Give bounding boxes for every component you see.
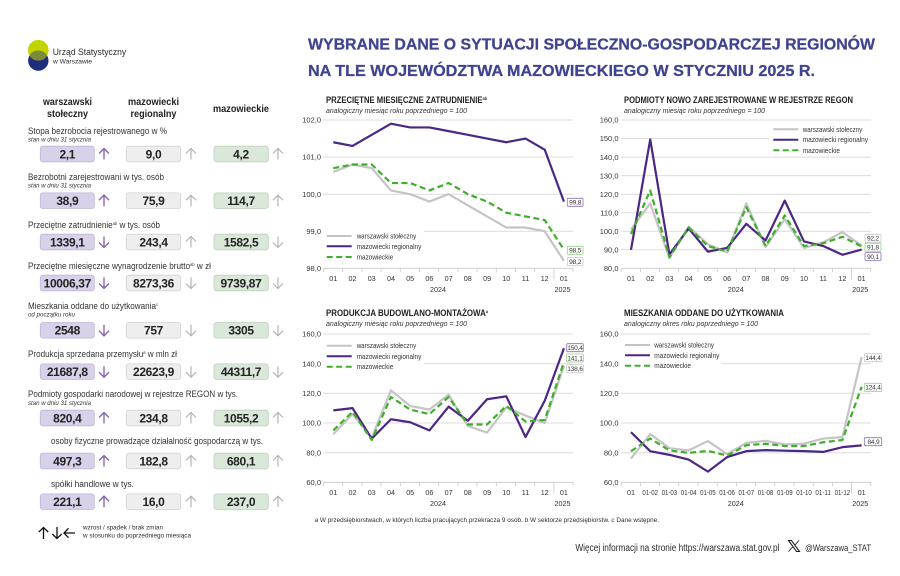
x axis: 01-12 xyxy=(835,488,850,497)
arrow legend: wzrost / spadek / brak zmian xyxy=(82,525,163,532)
y axis labels: 120,0 xyxy=(600,190,618,199)
indicator: produkcja sprzedana przemysłu: w mln zł xyxy=(145,349,177,359)
y axis labels: 100,0 xyxy=(302,419,321,428)
indicator: przeciętne wynagrodzenie: 10006,37 xyxy=(44,276,92,290)
indicator: stopa bezrobocia: Stopa bezrobocia rejestrowanego w % xyxy=(28,126,167,136)
indicator: stopa bezrobocia: 2,1 xyxy=(59,147,76,161)
indicator: przeciętne wynagrodzenie: w zł xyxy=(195,261,211,271)
indicator: osoby fizyczne: 182,8 xyxy=(139,454,168,468)
x axis: 02 xyxy=(348,488,356,497)
y axis labels: 140,0 xyxy=(600,153,618,162)
x axis xyxy=(621,268,871,294)
indicator: osoby fizyczne: 680,1 xyxy=(227,454,256,468)
indicator: przeciętne zatrudnienie: 1339,1 xyxy=(50,235,85,249)
x axis: 01-06 xyxy=(719,488,735,497)
x axis: 06 xyxy=(723,274,731,283)
y axis labels: 99,0 xyxy=(306,227,321,236)
chart subtitle: analogiczny miesiąc roku poprzedniego = 100 xyxy=(624,106,766,115)
end value labels xyxy=(864,354,882,446)
chart title: PRZECIĘTNE MIESIĘCZNE ZATRUDNIENIE xyxy=(326,95,509,105)
x axis: 2024 xyxy=(430,499,446,508)
chart: produkcja budowlano-montażowa xyxy=(302,308,583,508)
chart title: a xyxy=(486,309,488,314)
x axis: 02 xyxy=(348,274,356,283)
x axis: 05 xyxy=(406,274,414,283)
x axis: 01-05 xyxy=(700,488,716,497)
indicator: mieszkania oddane: 2548 xyxy=(55,324,81,338)
indicator: bezrobotni zarejestrowani: Bezrobotni zarejestrowani w tys. osób xyxy=(28,172,164,182)
end value labels xyxy=(567,198,583,266)
x axis: 01-08 xyxy=(758,488,773,497)
y axis labels: 130,0 xyxy=(600,171,618,180)
end value labels: 98,5 xyxy=(569,248,582,255)
x axis: 04 xyxy=(685,274,693,283)
x axis: 2024 xyxy=(728,499,744,508)
y axis labels: 90,0 xyxy=(604,246,618,254)
indicator: podmioty w rejestrze REGON: 1055,2 xyxy=(224,411,259,425)
column headers: warszawski xyxy=(42,97,92,108)
chart: podmioty nowo zarejestrowane xyxy=(600,95,881,294)
indicator: przeciętne zatrudnienie: 1582,5 xyxy=(224,235,259,249)
x axis: 2025 xyxy=(852,499,868,508)
y axis labels: 100,0 xyxy=(302,190,321,199)
chart title: PODMIOTY NOWO ZAREJESTROWANE W REJESTRZE REGON xyxy=(624,95,853,105)
column headers: stołeczny xyxy=(47,109,88,120)
x axis: 04 xyxy=(387,274,395,283)
y axis labels xyxy=(600,330,618,487)
x axis: 01-04 xyxy=(681,488,697,497)
y axis labels: 80,0 xyxy=(604,448,618,457)
y axis labels: 160,0 xyxy=(600,330,618,339)
end value labels: 124,4 xyxy=(865,385,881,392)
indicator: podmioty w rejestrze REGON: stan w dniu 31 stycznia xyxy=(28,401,92,407)
indicator: przeciętne zatrudnienie: 243,4 xyxy=(139,235,168,249)
indicator: produkcja sprzedana przemysłu: 44311,7 xyxy=(221,365,262,379)
y axis labels: 98,0 xyxy=(306,264,321,273)
x axis: 07 xyxy=(742,274,750,283)
y axis labels: 102,0 xyxy=(302,116,321,125)
x axis: 10 xyxy=(502,274,510,283)
legend: mazowieckie xyxy=(654,361,691,370)
end value labels xyxy=(567,344,583,373)
indicator: mieszkania oddane: Mieszkania oddane do użytkowania xyxy=(28,301,170,311)
x axis: 01-02 xyxy=(642,488,658,497)
x axis: 03 xyxy=(368,274,376,283)
indicator: przeciętne wynagrodzenie: 9739,87 xyxy=(221,276,262,290)
x axis: 08 xyxy=(464,488,472,497)
x axis: 07 xyxy=(445,274,453,283)
y axis labels xyxy=(600,116,618,273)
indicator: przeciętne zatrudnienie xyxy=(28,220,283,250)
x axis: 09 xyxy=(781,274,789,283)
y axis labels: 100,0 xyxy=(600,227,618,236)
chart title: ab xyxy=(483,96,487,101)
legend xyxy=(773,125,868,155)
x axis: 06 xyxy=(425,488,433,497)
chart title: PRODUKCJA BUDOWLANO-MONTAŻOWA xyxy=(326,308,508,318)
indicator: stopa bezrobocia: 9,0 xyxy=(146,147,162,161)
indicator: osoby fizyczne: 497,3 xyxy=(53,454,82,468)
indicator: podmioty w rejestrze REGON: 820,4 xyxy=(53,411,82,425)
legend: warszawski stołeczny xyxy=(356,341,416,350)
end value labels xyxy=(865,234,881,261)
arrow legend: w stosunku do poprzedniego miesiąca xyxy=(82,532,191,539)
x axis: 01-07 xyxy=(739,488,754,497)
x axis: 2025 xyxy=(852,285,868,294)
x axis: 01-10 xyxy=(796,488,812,497)
column headers: mazowiecki xyxy=(128,97,179,108)
end value labels: 91,8 xyxy=(867,245,880,252)
x axis: 09 xyxy=(483,274,491,283)
legend: mazowieckie xyxy=(803,146,840,155)
arrow legend xyxy=(39,525,191,539)
x axis: 12 xyxy=(541,274,549,283)
y axis labels: 60,0 xyxy=(306,478,321,487)
indicator: mieszkania oddane: c xyxy=(156,302,159,307)
indicator: produkcja sprzedana przemysłu xyxy=(28,349,283,380)
x axis: 06 xyxy=(425,274,433,283)
data lines xyxy=(631,139,862,258)
y axis labels: 140,0 xyxy=(600,359,618,368)
footer: more information link: Więcej informacji na stronie https://warszawa.stat.gov.pl xyxy=(575,543,779,554)
y axis labels: 80,0 xyxy=(306,448,321,457)
indicator: bezrobotni zarejestrowani: 75,9 xyxy=(143,194,165,208)
x axis: 01 xyxy=(329,488,337,497)
title: NA TLE WOJEWÓDZTWA MAZOWIECKIEGO W STYCZNIU 2025 R. xyxy=(308,61,815,80)
y axis labels xyxy=(302,116,321,273)
end value labels: 98,2 xyxy=(569,259,582,266)
title: WYBRANE DANE O SYTUACJI SPOŁECZNO-GOSPODARCZEJ REGIONÓW xyxy=(308,34,876,53)
x axis: 01 xyxy=(560,488,568,497)
legend xyxy=(327,341,422,371)
legend: mazowiecki regionalny xyxy=(357,242,422,251)
title xyxy=(308,34,876,80)
end value labels: 150,4 xyxy=(567,345,583,352)
x axis: 05 xyxy=(704,274,712,283)
y axis labels: 160,0 xyxy=(600,116,618,125)
chart subtitle: analogiczny okres roku poprzedniego = 100 xyxy=(624,319,759,328)
x axis: 10 xyxy=(800,274,808,283)
logo: Urząd Statystyczny w Warszawie xyxy=(28,40,127,71)
x axis: 01 xyxy=(627,488,635,497)
data lines xyxy=(333,124,564,261)
indicator: przeciętne zatrudnienie: w tys. osób xyxy=(117,220,160,230)
footer: X handle: @Warszawa_STAT xyxy=(805,543,871,553)
y axis labels: 101,0 xyxy=(302,153,321,162)
y axis labels: 120,0 xyxy=(302,389,321,398)
x axis: 10 xyxy=(502,488,510,497)
x axis: 11 xyxy=(522,488,529,497)
indicator: spółki handlowe xyxy=(40,479,283,510)
x axis: 04 xyxy=(387,488,395,497)
legend: mazowieckie xyxy=(357,362,393,371)
y axis labels: 60,0 xyxy=(604,478,618,487)
chart subtitle: analogiczny miesiąc roku poprzedniego = 100 xyxy=(326,319,468,328)
y axis labels: 80,0 xyxy=(604,264,618,273)
indicator: bezrobotni zarejestrowani: stan w dniu 31 stycznia xyxy=(28,184,92,190)
end value labels: 92,2 xyxy=(867,236,880,243)
indicator: spółki handlowe: 221,1 xyxy=(53,495,82,509)
x axis: 2024 xyxy=(430,285,446,294)
indicator: podmioty w rejestrze REGON xyxy=(28,389,283,426)
x axis: 12 xyxy=(541,488,549,497)
chart title: MIESZKANIA ODDANE DO UŻYTKOWANIA xyxy=(624,308,784,318)
x axis: 2024 xyxy=(728,285,744,294)
x axis: 01 xyxy=(627,274,635,283)
indicator: podmioty w rejestrze REGON: 234,8 xyxy=(139,411,168,425)
legend: warszawski stołeczny xyxy=(802,125,863,134)
indicator: przeciętne wynagrodzenie: Przeciętne miesięczne wynagrodzenie brutto xyxy=(28,261,207,271)
indicator: przeciętne zatrudnienie: Przeciętne zatrudnienie xyxy=(28,220,122,230)
indicator: spółki handlowe: 237,0 xyxy=(227,495,256,509)
x axis: 01-09 xyxy=(777,488,793,497)
indicator: bezrobotni zarejestrowani xyxy=(28,172,283,208)
legend xyxy=(327,232,422,262)
x axis: 2025 xyxy=(554,285,570,294)
x axis: 01 xyxy=(858,274,866,283)
icon: X logo xyxy=(788,540,800,552)
indicator: stopa bezrobocia xyxy=(28,126,283,162)
x axis: 01 xyxy=(858,488,866,497)
y axis labels xyxy=(302,330,321,487)
x axis: 02 xyxy=(646,274,654,283)
legend: mazowiecki regionalny xyxy=(803,135,868,144)
y axis labels: 120,0 xyxy=(600,389,618,398)
indicator: produkcja sprzedana przemysłu: 21687,8 xyxy=(47,365,88,379)
indicator: mieszkania oddane: 3305 xyxy=(228,324,254,338)
x axis: 05 xyxy=(406,488,414,497)
indicator: przeciętne zatrudnienie: ab xyxy=(113,221,118,226)
logo: Urząd Statystyczny w Warszawie: w Warszawie xyxy=(52,58,93,66)
legend: mazowieckie xyxy=(357,252,393,262)
legend: warszawski stołeczny xyxy=(653,340,714,350)
y axis labels: 160,0 xyxy=(302,330,321,339)
column headers: mazowieckie xyxy=(213,104,269,115)
end value labels: 141,1 xyxy=(567,355,583,362)
legend: mazowiecki regionalny xyxy=(654,351,720,360)
data lines xyxy=(333,348,564,440)
legend: mazowiecki regionalny xyxy=(357,352,422,361)
chart: mieszkania oddane do użytkowania xyxy=(600,308,882,508)
indicator: przeciętne wynagrodzenie: ab xyxy=(190,262,195,267)
indicator: mieszkania oddane: od początku roku xyxy=(28,312,76,318)
x axis xyxy=(621,482,871,508)
legend xyxy=(625,340,720,370)
indicator: bezrobotni zarejestrowani: 38,9 xyxy=(56,194,79,208)
x axis: 03 xyxy=(665,274,673,283)
end value labels: 90,1 xyxy=(867,254,880,261)
x axis: 2025 xyxy=(554,499,570,508)
x axis xyxy=(324,268,573,294)
chart subtitle: analogiczny miesiąc roku poprzedniego = 100 xyxy=(326,106,468,115)
end value labels: 138,6 xyxy=(567,366,583,373)
chart: przeciętne miesięczne zatrudnienie xyxy=(302,95,583,294)
indicator: przeciętne wynagrodzenie: 8273,36 xyxy=(133,276,175,290)
indicator: spółki handlowe: spółki handlowe w tys. xyxy=(51,479,134,489)
footnotes: a W przedsiębiorstwach, w których liczba pracujących przekracza 9 osób. b W sektorze przedsiębiorstw. c Dane wstępne. xyxy=(315,517,659,524)
logo: Urząd Statystyczny w Warszawie: Urząd Statystyczny xyxy=(53,47,127,57)
indicator: spółki handlowe: 16,0 xyxy=(143,495,165,509)
indicator: stopa bezrobocia: 4,2 xyxy=(233,147,249,161)
x axis: 01-11 xyxy=(815,488,831,497)
y axis labels: 140,0 xyxy=(302,359,321,368)
y axis labels: 110,0 xyxy=(600,208,618,217)
x axis: 01 xyxy=(560,274,568,283)
indicator: produkcja sprzedana przemysłu: a xyxy=(143,350,146,355)
x axis: 01-03 xyxy=(662,488,677,497)
x axis xyxy=(324,482,573,508)
x axis: 01 xyxy=(329,274,337,283)
x axis: 08 xyxy=(762,274,770,283)
end value labels: 144,4 xyxy=(865,355,881,362)
end value labels: 99,8 xyxy=(569,200,582,207)
indicator: przeciętne wynagrodzenie xyxy=(28,261,283,291)
indicator: podmioty w rejestrze REGON: Podmioty gospodarki narodowej w rejestrze REGON w tys. xyxy=(28,389,238,399)
legend: warszawski stołeczny xyxy=(356,232,416,240)
indicator: osoby fizyczne: osoby fizyczne prowadzące działalność gospodarczą w tys. xyxy=(51,436,263,446)
y axis labels: 150,0 xyxy=(600,134,618,143)
data lines xyxy=(631,357,862,472)
x axis: 09 xyxy=(483,488,491,497)
x axis: 07 xyxy=(445,488,453,497)
indicator: bezrobotni zarejestrowani: 114,7 xyxy=(227,194,255,208)
indicator: osoby fizyczne xyxy=(40,436,283,469)
x axis: 12 xyxy=(838,274,846,283)
column headers xyxy=(42,97,269,120)
x axis: 03 xyxy=(368,488,376,497)
indicator: mieszkania oddane: 757 xyxy=(144,324,164,338)
end value labels: 84,9 xyxy=(867,439,880,446)
x axis: 11 xyxy=(819,274,827,283)
indicator: mieszkania oddane xyxy=(28,301,283,338)
y axis labels: 100,0 xyxy=(600,419,618,428)
indicator: produkcja sprzedana przemysłu: Produkcja sprzedana przemysłu xyxy=(28,349,156,359)
indicator: stopa bezrobocia: stan w dniu 31 stycznia xyxy=(28,138,92,144)
x axis: 08 xyxy=(464,274,472,283)
column headers: regionalny xyxy=(130,109,177,120)
indicator: produkcja sprzedana przemysłu: 22623,9 xyxy=(133,365,175,379)
x axis: 11 xyxy=(522,274,529,283)
